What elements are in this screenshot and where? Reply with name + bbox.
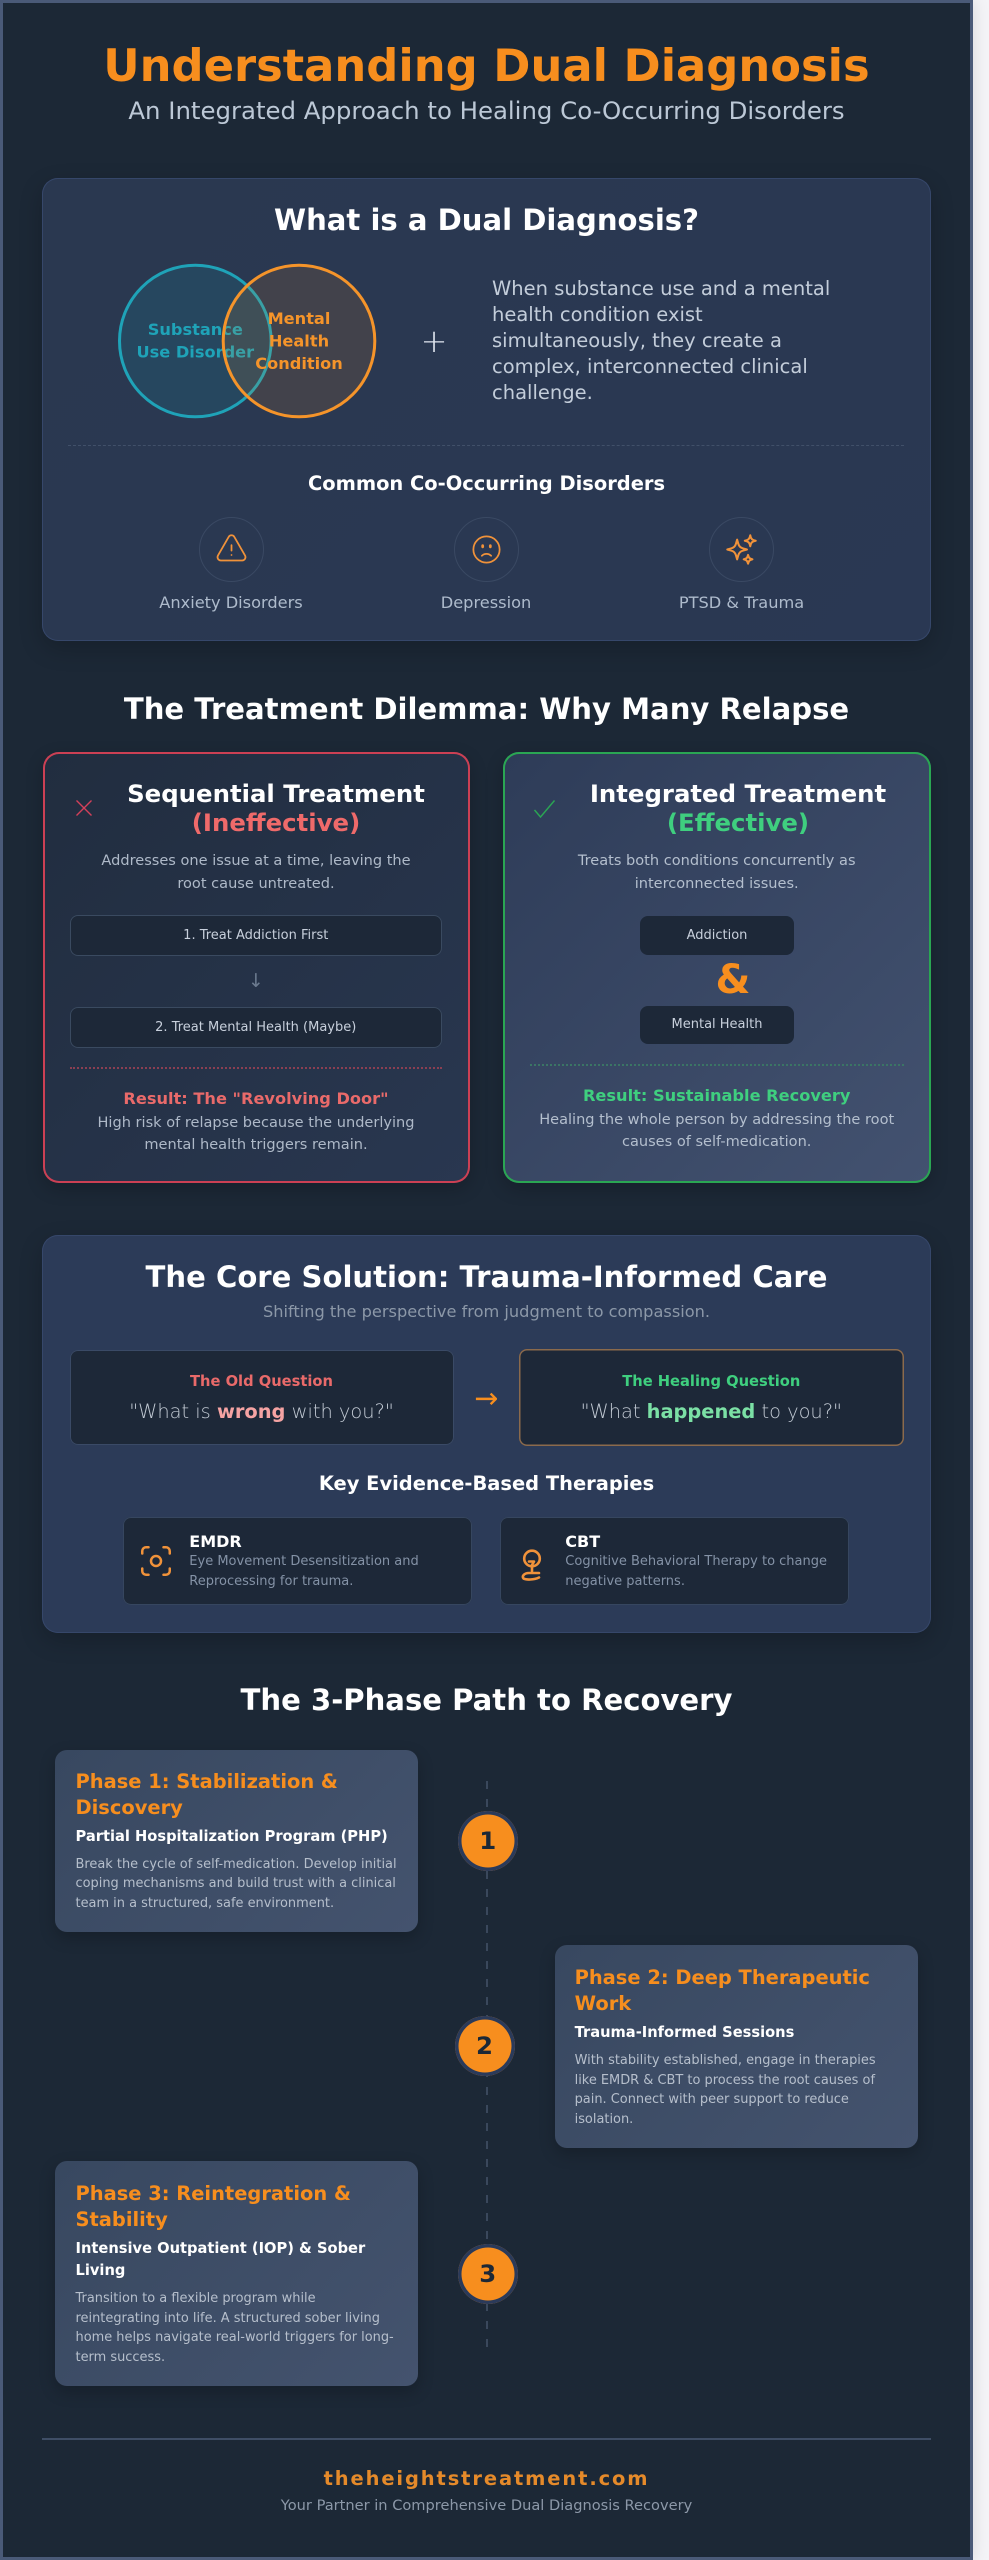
phase 2 card	[555, 1945, 918, 2148]
phase description: home helps navigate real-world triggers for long-	[76, 2330, 394, 2345]
heading: What is a Dual Diagnosis?	[274, 203, 699, 237]
panel: what is a dual diagnosis	[42, 178, 931, 641]
phase description	[75, 2291, 394, 2365]
panel: sequential treatment	[42, 752, 470, 1183]
phase 1 card	[55, 1750, 418, 1932]
phase description: reintegrating into life. A structured sober living	[76, 2311, 380, 2326]
description	[101, 852, 411, 892]
timeline line	[486, 1781, 488, 2357]
heading: recovery path: The 3-Phase Path to Recovery	[241, 1683, 732, 1717]
result: Healing the whole person by addressing the root	[539, 1111, 894, 1128]
result: Result: The "Revolving Door"	[123, 1089, 389, 1108]
icon: sad face	[472, 536, 500, 564]
healing question box	[519, 1349, 904, 1446]
box: addiction: Addiction	[687, 928, 747, 942]
step 2: 2. Treat Mental Health (Maybe)	[155, 1020, 356, 1035]
footer website: theheightstreatment.com	[324, 2466, 649, 2490]
arrow down: ↓	[248, 970, 264, 992]
phase description: like EMDR & CBT to process the root causes of	[575, 2073, 875, 2088]
card heading	[590, 779, 886, 837]
phase title	[575, 1966, 870, 2015]
therapy: emdr: Eye Movement Desensitization and	[189, 1554, 419, 1569]
disorder: ptsd	[679, 517, 804, 612]
card heading: Integrated Treatment	[590, 779, 886, 808]
phase description: Break the cycle of self-medication. Develop initial	[76, 1857, 397, 1872]
icon: viewfinder eye	[141, 1546, 171, 1576]
definition text: complex, interconnected clinical	[492, 355, 808, 378]
icon: head and thought	[522, 1549, 542, 1581]
phase program	[76, 2240, 366, 2279]
result	[97, 1089, 415, 1153]
icon: check mark	[534, 800, 555, 818]
plus sign: +	[421, 322, 447, 360]
icon: x mark	[76, 800, 92, 816]
phase 3 card	[55, 2161, 418, 2386]
result: mental health triggers remain.	[144, 1136, 368, 1153]
phase title: Phase 2: Deep Therapeutic	[575, 1966, 870, 1989]
therapy: emdr: EMDR	[189, 1532, 242, 1551]
result: Result: Sustainable Recovery	[583, 1086, 850, 1105]
label: The Old Question	[190, 1372, 333, 1390]
phase 3 number	[458, 2244, 518, 2304]
quote: "What is wrong with you?"	[129, 1400, 394, 1423]
disorder: ptsd: PTSD & Trauma	[679, 593, 804, 612]
box: addiction	[640, 916, 794, 955]
description	[578, 852, 856, 892]
therapy: emdr: Reprocessing for trauma.	[189, 1574, 353, 1589]
phase description: team in a structured, safe environment.	[76, 1896, 334, 1911]
disorder: anxiety	[159, 517, 303, 612]
ampersand: &	[716, 957, 750, 1003]
therapy: cbt: Cognitive Behavioral Therapy to change	[565, 1554, 827, 1569]
phase description: With stability established, engage in therapies	[575, 2053, 876, 2068]
icon: warning triangle	[216, 534, 246, 562]
quote: "What happened to you?"	[581, 1400, 842, 1423]
phase description: isolation.	[575, 2112, 633, 2127]
phase title: Work	[575, 1992, 631, 2015]
definition text: health condition exist	[492, 303, 703, 326]
arrow right: →	[474, 1381, 499, 1415]
footer tagline: Your Partner in Comprehensive Dual Diagnosis Recovery	[281, 2497, 692, 2514]
label: The Healing Question	[622, 1372, 800, 1390]
step 1: 1. Treat Addiction First	[183, 928, 328, 943]
icon: sparkles	[726, 534, 757, 565]
phase title: Phase 1: Stabilization &	[76, 1770, 338, 1793]
phase 1 number: 1	[479, 1826, 496, 1855]
phase title	[76, 2182, 351, 2230]
subheading: common disorders: Common Co-Occurring Disorders	[308, 472, 665, 495]
description: interconnected issues.	[635, 875, 799, 892]
phase program: Partial Hospitalization Program (PHP)	[76, 1828, 388, 1845]
result	[539, 1086, 894, 1150]
description: Treats both conditions concurrently as	[578, 852, 856, 869]
description: root cause untreated.	[177, 875, 335, 892]
heading: treatment dilemma: The Treatment Dilemma: Why Many Relapse	[124, 692, 849, 726]
panel: core solution	[42, 1235, 931, 1633]
card heading: (Ineffective)	[192, 808, 360, 837]
phase 2 number	[454, 2016, 514, 2076]
old question box	[70, 1350, 454, 1445]
venn diagram: Use Disorder	[136, 342, 254, 362]
definition text: simultaneously, they create a	[492, 329, 782, 352]
definition text	[492, 277, 830, 404]
phase title	[76, 1770, 338, 1819]
disorder: depression	[441, 517, 531, 612]
card heading: Sequential Treatment	[127, 779, 425, 808]
venn diagram: Mental	[268, 309, 330, 328]
step 1	[70, 915, 442, 956]
card heading: (Effective)	[667, 808, 809, 837]
subheading: Shifting the perspective from judgment to compassion.	[263, 1302, 710, 1321]
venn diagram: Condition	[255, 354, 343, 373]
phase program: Intensive Outpatient (IOP) & Sober	[76, 2240, 365, 2256]
phase 1 number	[458, 1811, 518, 1871]
box: mental health: Mental Health	[672, 1016, 762, 1032]
phase title: Phase 3: Reintegration &	[76, 2182, 351, 2204]
therapy: emdr	[123, 1517, 472, 1605]
phase 3 number: 3	[479, 2259, 496, 2288]
venn diagram: Health	[269, 332, 329, 350]
result: High risk of relapse because the underlying	[97, 1114, 415, 1131]
result: causes of self-medication.	[622, 1133, 811, 1150]
panel: integrated treatment	[503, 752, 931, 1183]
phase description: term success.	[76, 2350, 165, 2365]
phase title: Stability	[76, 2208, 168, 2230]
description: Addresses one issue at a time, leaving the	[101, 852, 411, 869]
venn diagram	[118, 264, 376, 418]
venn diagram: Substance	[148, 320, 243, 339]
subtitle: An Integrated Approach to Healing Co-Occurring Disorders	[128, 96, 845, 125]
definition text: When substance use and a mental	[492, 277, 830, 300]
box: mental health	[640, 1006, 794, 1044]
phase program: Trauma-Informed Sessions	[575, 2024, 794, 2041]
therapy: cbt	[500, 1517, 849, 1605]
step 2	[70, 1007, 442, 1048]
phase description	[76, 1857, 397, 1911]
therapy: cbt: negative patterns.	[565, 1574, 685, 1589]
phase description: pain. Connect with peer support to reduce	[575, 2092, 849, 2107]
phase description: coping mechanisms and build trust with a clinical	[76, 1876, 396, 1891]
definition text: challenge.	[492, 381, 593, 404]
phase description	[575, 2053, 876, 2127]
disorder: depression: Depression	[441, 593, 531, 612]
title: Understanding Dual Diagnosis	[103, 39, 870, 92]
therapy: cbt: CBT	[565, 1532, 600, 1551]
disorder: anxiety: Anxiety Disorders	[159, 593, 303, 612]
card heading	[127, 779, 425, 837]
phase description: Transition to a flexible program while	[76, 2291, 316, 2306]
heading: The Core Solution: Trauma-Informed Care	[146, 1260, 827, 1294]
subheading: therapies: Key Evidence-Based Therapies	[319, 1472, 654, 1495]
phase title: Discovery	[76, 1796, 183, 1819]
phase program: Living	[76, 2262, 125, 2279]
phase 2 number: 2	[476, 2031, 493, 2060]
